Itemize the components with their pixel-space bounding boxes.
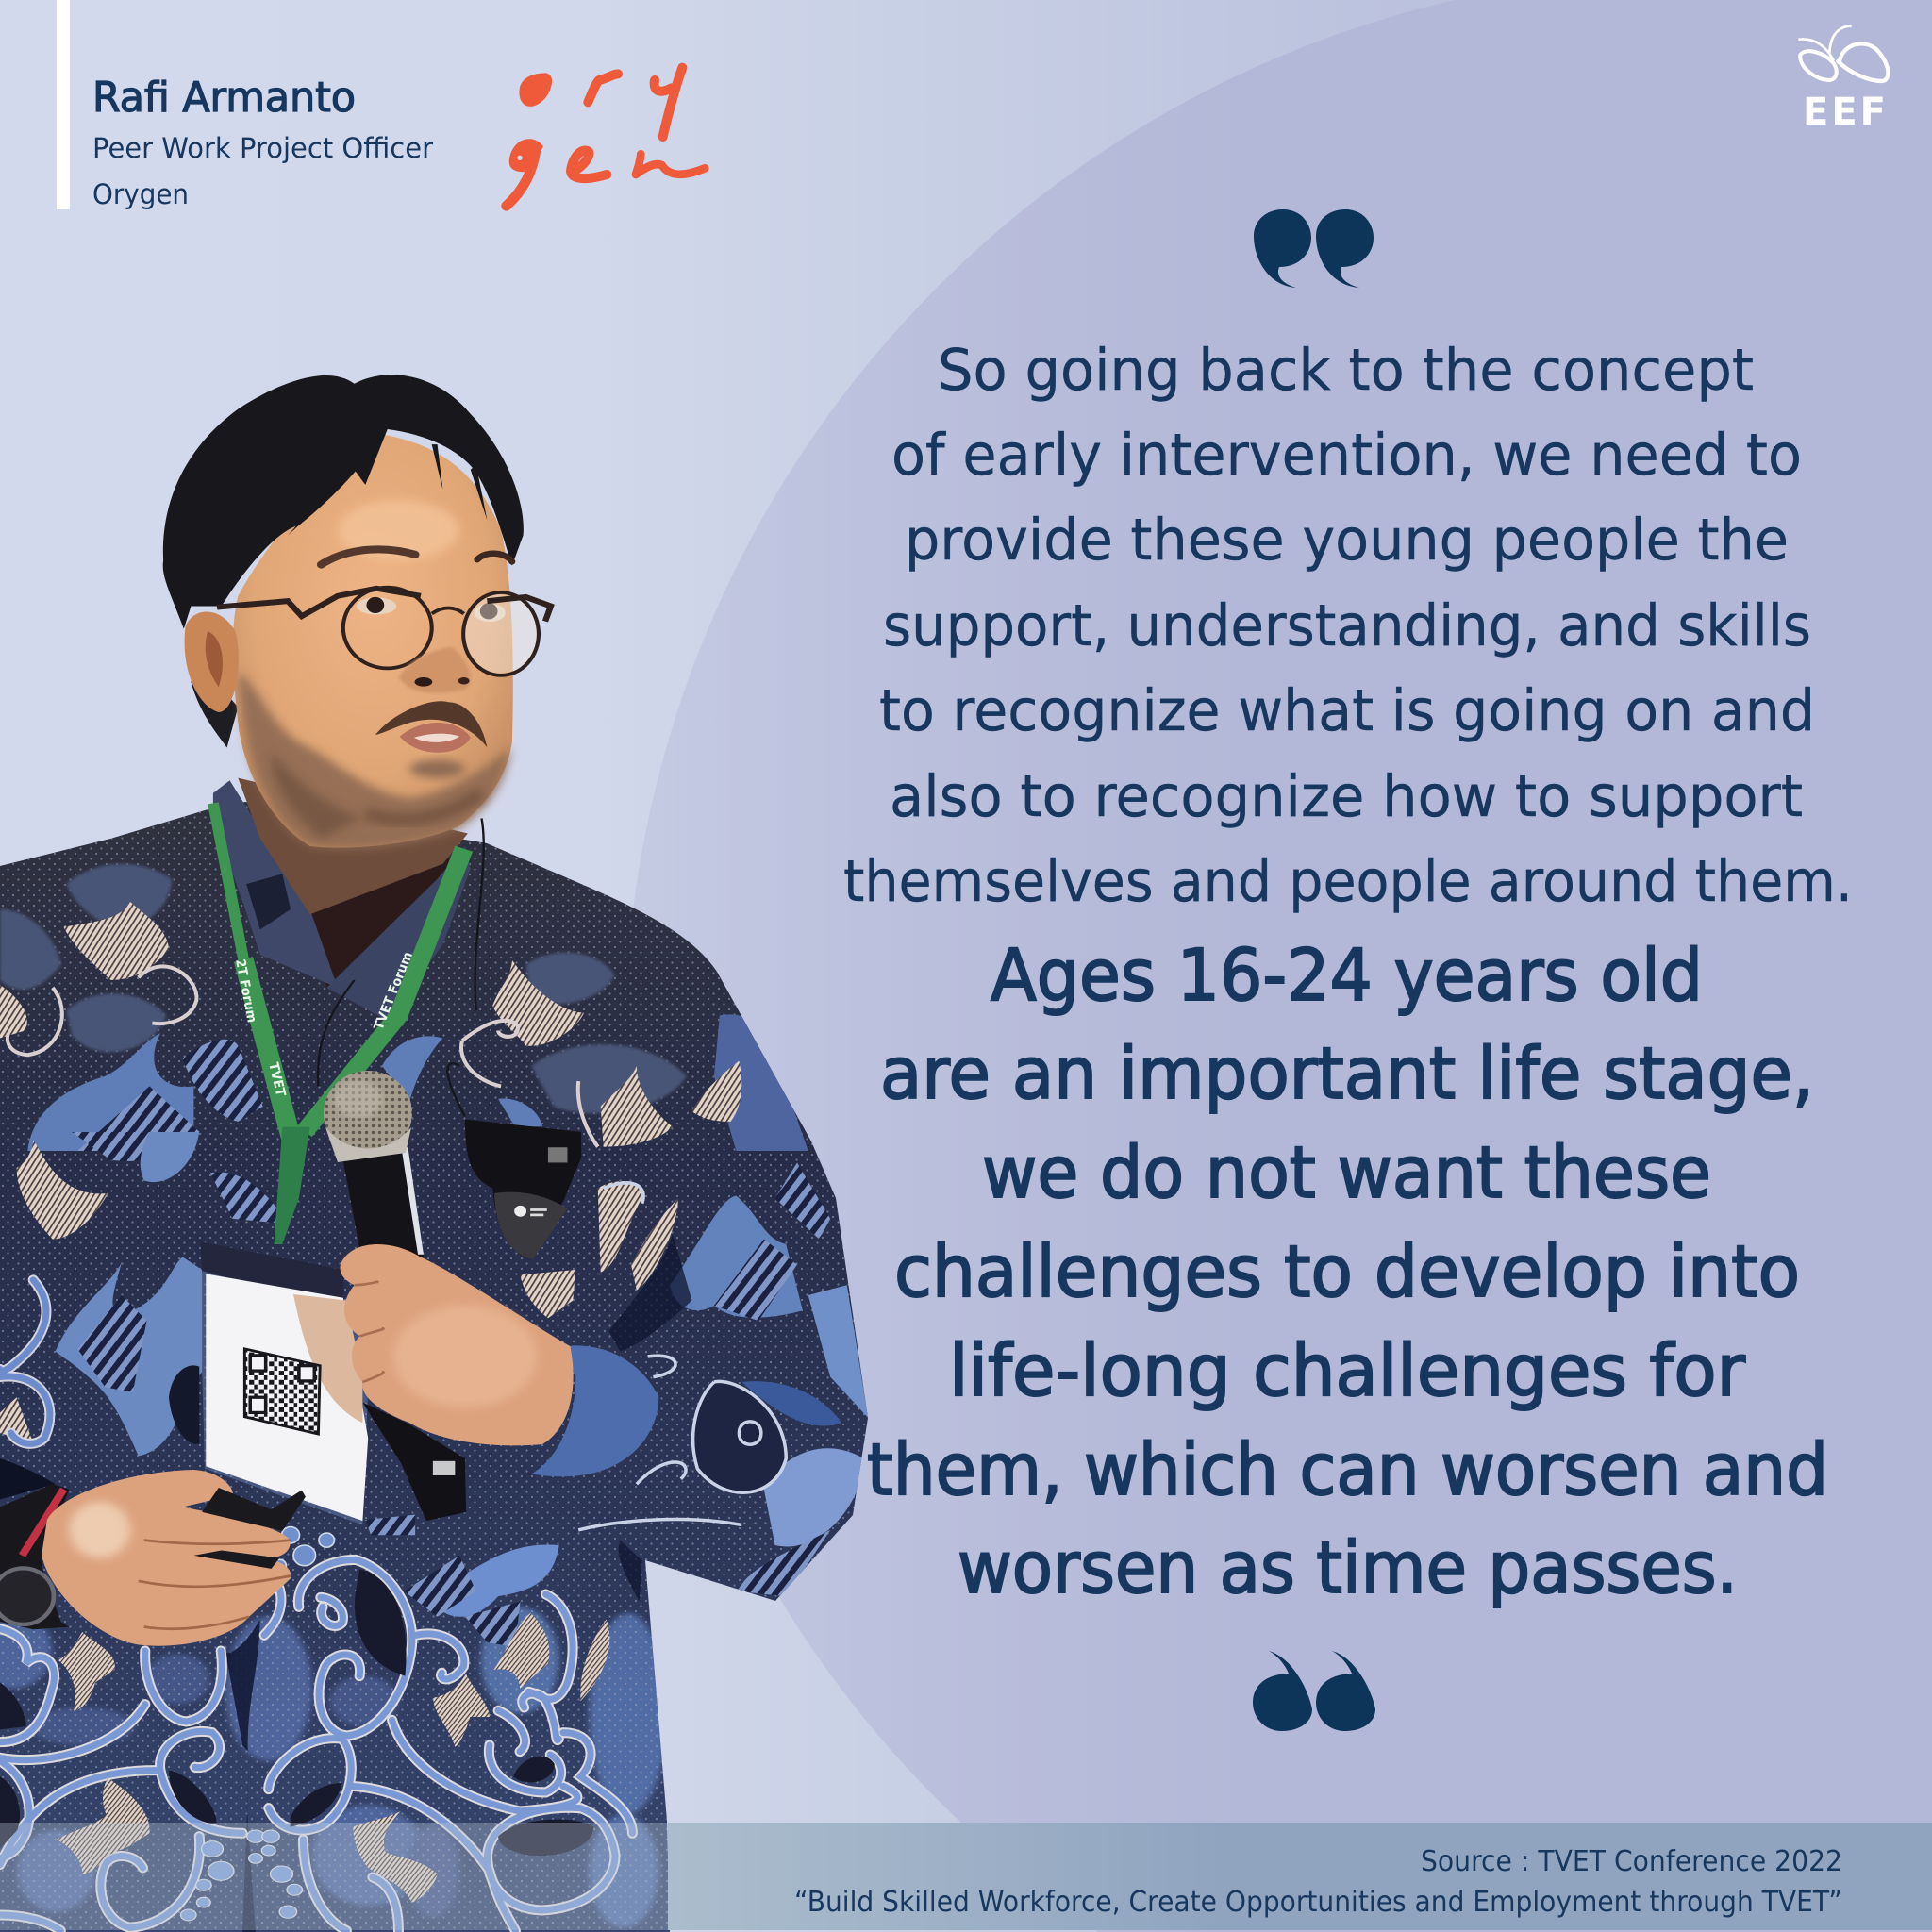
quote text: emphasised lines: challenges to develop into	[894, 1229, 1800, 1313]
source text	[794, 1845, 1842, 1919]
stomach wings	[443, 1545, 559, 1617]
left chest motifs	[56, 1257, 202, 1456]
source band	[0, 1823, 1932, 1930]
quote panel: opening mark	[1254, 209, 1374, 288]
quote text: emphasised lines: life-long challenges for	[949, 1328, 1746, 1412]
mic upper handle	[342, 1145, 424, 1265]
ear wire	[318, 818, 484, 1117]
logo: EEF butterfly	[1799, 26, 1888, 81]
logo text: EEF: EEF	[1803, 91, 1886, 134]
shirt	[0, 802, 877, 1932]
lens shading	[464, 594, 538, 674]
source text: “Build Skilled Workforce, Create Opportunities and Employment through TVET”	[794, 1886, 1842, 1919]
face	[233, 434, 513, 848]
head, neck and lanyard: TVET	[265, 1061, 289, 1098]
quote panel: closing mark	[1253, 1651, 1375, 1731]
quote text: emphasised lines: are an important life stage,	[880, 1031, 1814, 1115]
neck	[238, 778, 468, 914]
glasses	[217, 588, 551, 675]
speaker name and role: Rafi Armanto	[92, 74, 356, 122]
QR code	[244, 1349, 320, 1434]
quote text: regular lines: of early intervention, we need to	[891, 422, 1802, 489]
right hand	[341, 1244, 574, 1445]
ear	[185, 611, 239, 712]
quote text: regular lines: themselves and people around them.	[843, 848, 1853, 915]
mic head	[324, 1071, 412, 1162]
speaker name and role: Peer Work Project Officer	[92, 132, 433, 164]
quote text: emphasised lines: them, which can worsen and	[867, 1427, 1828, 1511]
white header bar	[57, 0, 70, 209]
speaker name and role: Orygen	[92, 178, 189, 210]
eyes	[357, 597, 396, 615]
quote text: regular lines: to recognize what is going on and	[879, 677, 1815, 744]
quote text: regular lines: support, understanding, and skills	[883, 592, 1811, 659]
hair	[163, 375, 524, 629]
collar left	[213, 780, 338, 988]
upper flow lines	[0, 1280, 50, 1443]
quote text: regular lines: also to recognize how to support	[890, 763, 1803, 830]
nose	[398, 646, 471, 693]
lanyard clip	[274, 1127, 310, 1244]
collar right	[326, 846, 471, 1021]
photo: speaker in batik shirt	[0, 375, 877, 1932]
face highlight	[338, 500, 459, 560]
large background circle	[625, 0, 1932, 1932]
speaker name and role	[92, 74, 433, 210]
pocket device	[0, 1119, 581, 1646]
watch and strap	[0, 1484, 69, 1629]
mic lower handle	[362, 1403, 466, 1521]
head, neck and lanyard	[163, 375, 551, 1147]
lower shirt batik	[0, 1559, 632, 1932]
beard	[238, 672, 510, 849]
quote text: emphasised lines: worsen as time passes.	[958, 1525, 1738, 1609]
side hair	[191, 661, 238, 747]
source text: Source : TVET Conference 2022	[1421, 1845, 1842, 1878]
badge holder plastic	[200, 1241, 343, 1300]
moustache	[375, 701, 487, 747]
clicker remote	[202, 1488, 306, 1531]
left hand	[42, 1470, 291, 1646]
head, neck and lanyard: TVET Forum	[371, 950, 416, 1032]
right sleeve	[670, 1196, 803, 1318]
badge card	[206, 1274, 368, 1521]
quote text: regular lines: provide these young people the	[905, 507, 1789, 574]
eyebrows	[321, 549, 415, 565]
quote text: emphasised lines: Ages 16-24 years old	[991, 933, 1703, 1017]
sleeve shadow fold	[608, 1234, 692, 1352]
quote text: regular lines: So going back to the concept	[938, 337, 1754, 404]
mouth	[400, 723, 471, 753]
logo: orygen	[507, 68, 705, 206]
quote text: emphasised lines	[867, 933, 1828, 1609]
quote text: emphasised lines: we do not want these	[982, 1130, 1711, 1214]
neck shadow	[260, 843, 459, 988]
lanyard	[213, 803, 464, 1147]
head, neck and lanyard: 2T Forum	[232, 958, 259, 1024]
quote text: regular lines	[843, 337, 1853, 915]
